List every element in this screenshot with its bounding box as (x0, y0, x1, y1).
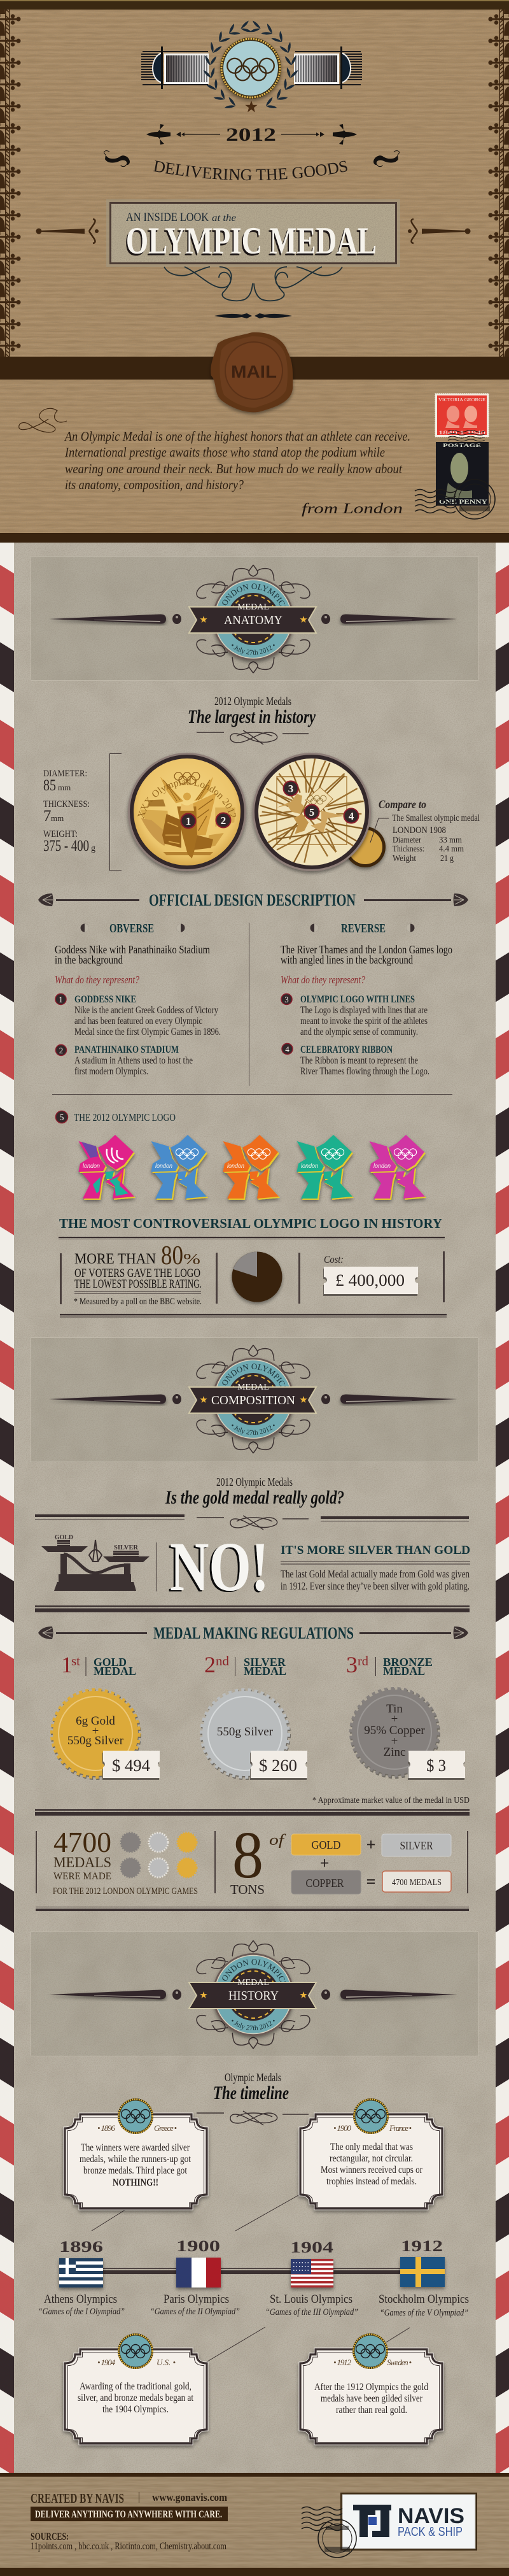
medal rank: 2nd silver: nd (216, 1653, 229, 1669)
stat: more than 80 percent: 80 (161, 1241, 183, 1270)
card: 1904: silver, and bronze medals began at (78, 2393, 193, 2403)
heading: the largest in history: The largest in history (188, 706, 316, 727)
timeline stop: 1896 Greece: 1896 (59, 2238, 103, 2256)
left rope ornament border (0, 10, 21, 357)
logo: orange: london (227, 1163, 244, 1170)
heading: is the gold medal really gold: 2012 Olympic Medals (216, 1476, 293, 1488)
timeline stop: 1904 USA (265, 2239, 358, 2317)
heading: the 2012 Olympic logo (56, 1111, 176, 1123)
stat: 8 tons equation: 8 (232, 1818, 263, 1892)
panel: gray paper with airmail edges (0, 543, 509, 2473)
timeline stop: 1900 France: “Games of the II Olympiad” (150, 2307, 240, 2317)
icon: left plane (146, 124, 171, 145)
footer credits (31, 2491, 228, 2552)
timeline stop: 1912 Sweden (379, 2238, 469, 2318)
left pin ornament (36, 219, 99, 243)
medal rank: 2nd silver: 2 (204, 1652, 216, 1677)
column: reverse: REVERSE (341, 922, 386, 936)
silver statement (281, 1544, 470, 1592)
timeline (38, 2238, 469, 2318)
heading: the timeline: The timeline (213, 2082, 289, 2103)
timeline stop: 1896 Greece: Athens Olympics (44, 2293, 117, 2306)
medal rank: 3rd bronze: rd (358, 1653, 368, 1669)
pointer lines (92, 2189, 410, 2367)
stats: diameter thickness weight (43, 754, 122, 871)
compare to smallest medal (370, 798, 480, 864)
item 1 goddess nike: GODDESS NIKE (74, 994, 136, 1005)
logo: green (296, 1135, 354, 1200)
stats: diameter thickness weight: 85 (43, 777, 56, 794)
heading: the 2012 Olympic logo: 5 (60, 1113, 64, 1123)
card: 1904: Awarding of the traditional gold, (80, 2381, 192, 2392)
top dark strip (0, 0, 509, 10)
title plate: an inside look at the Olympic medal (106, 199, 400, 267)
item 4 celebratory ribbon: CELEBRATORY RIBBON (300, 1044, 393, 1055)
item 3 olympic logo with lines: meant to invoke the spirit of the athletes (300, 1016, 428, 1027)
item 3 olympic logo with lines: OLYMPIC LOGO WITH LINES (300, 994, 415, 1005)
stat: 8 tons equation (230, 1818, 451, 1897)
timeline stop: 1896 Greece: “Games of the I Olympiad” (38, 2307, 125, 2317)
laurel wreath (204, 21, 298, 111)
section banner: medal composition (31, 1337, 478, 1462)
seal: silver composition: 550g Silver (217, 1725, 274, 1739)
footnote: * Approximate market value of the medal in USD (312, 1796, 470, 1805)
stat: 8 tons equation: + (366, 1835, 375, 1854)
column: obverse: OBVERSE (109, 922, 154, 936)
compare to smallest medal: Thickness: (393, 844, 424, 854)
medal: obverse (126, 753, 248, 875)
column: reverse (281, 922, 452, 1077)
column: reverse: What do they represent? (281, 974, 365, 986)
card: 1912 (300, 2333, 442, 2444)
stat: 4700 medals: WERE MADE (53, 1871, 111, 1882)
heading: medal making regulations (38, 1624, 468, 1642)
compare to smallest medal: Diameter (393, 836, 421, 845)
seal: bronze composition: 95% Copper (364, 1724, 425, 1737)
logo: magenta: london (373, 1163, 391, 1170)
subtitle: delivering the goods (104, 150, 400, 181)
signature: from London: from London (302, 501, 403, 516)
medallion (220, 38, 281, 99)
intro paragraph: wearing one around their neck. But how much do we really know about (65, 461, 403, 476)
section banner: medal anatomy: MEDAL (237, 602, 269, 612)
stat: 8 tons equation: + (320, 1854, 329, 1872)
title plate: an inside look at the Olympic medal: AN INSIDE LOOK (126, 211, 209, 224)
heading: medal making regulations: MEDAL MAKING REGULATIONS (153, 1624, 354, 1642)
stamp: red twin heads: 1840 1 1940 (438, 430, 485, 436)
seal: gold composition: 550g Silver (67, 1734, 124, 1747)
year 2012 with planes (146, 124, 357, 145)
item 4 celebratory ribbon: The Ribbon is meant to represent the (300, 1055, 418, 1066)
timeline stop: 1900 France: 1900 (176, 2238, 220, 2255)
card: 1900: The only medal that was (330, 2142, 413, 2153)
stamp: penny black: POSTAGE (443, 443, 481, 448)
card: 1896: medals, while the runners-up got (80, 2154, 191, 2165)
compare to smallest medal: Compare to (379, 798, 426, 811)
item 3 olympic logo with lines (281, 993, 428, 1037)
section banner: medal anatomy (31, 556, 478, 681)
title plate: an inside look at the Olympic medal: OLYMPIC MEDAL (126, 220, 377, 262)
postmark on stamps (415, 431, 495, 519)
stat: 8 tons equation: GOLD (312, 1839, 341, 1851)
flourish under title plate (164, 267, 342, 301)
stats: diameter thickness weight: WEIGHT: (43, 829, 78, 839)
timeline stop: 1912 Sweden: Stockholm Olympics (379, 2293, 469, 2306)
badge text: LONDON OLYMPICS (222, 1959, 286, 1982)
medal rank: 3rd bronze (346, 1652, 433, 1677)
compare to smallest medal: 33 mm (439, 836, 462, 845)
logo: blue (151, 1135, 208, 1200)
stat: 8 tons equation: SILVER (400, 1839, 433, 1852)
footer credits: www.gonavis.com (152, 2491, 227, 2503)
stat: 8 tons equation: 4700 MEDALS (392, 1878, 442, 1888)
card: 1900: • 1900 (333, 2123, 351, 2133)
medal: obverse: XXX Olympiad London 2012 (137, 778, 237, 819)
column: obverse: in the background (55, 953, 123, 966)
logo: paralympic pink (79, 1135, 136, 1200)
left swirl (104, 151, 130, 167)
timeline stop: 1904 USA: 1904 (290, 2239, 334, 2256)
medal rank: 1st gold: st (71, 1653, 80, 1669)
card: 1896: Greece • (154, 2123, 177, 2133)
small comparison medal (345, 827, 386, 867)
stat: more than 80 percent: OF VOTERS GAVE THE LOGO (74, 1267, 200, 1280)
column: reverse: The River Thames and the London Games logo (281, 943, 452, 956)
stats: diameter thickness weight: 375 - 400 (43, 837, 89, 855)
stat: 8 tons equation: = (366, 1872, 375, 1891)
timeline stop: 1904 USA: “Games of the III Olympiad” (265, 2307, 358, 2317)
stat: more than 80 percent (60, 1241, 218, 1307)
icon: right plane (333, 124, 357, 145)
dark band (0, 357, 509, 380)
item 4 celebratory ribbon: 4 (285, 1044, 289, 1054)
item 3 olympic logo with lines: The Logo is displayed with lines that are (300, 1005, 428, 1016)
medal: reverse (253, 753, 371, 871)
timeline stop: 1912 Sweden: “Games of the V Olympiad” (380, 2308, 468, 2318)
footer panel (0, 2473, 509, 2576)
icon: balance scale with gold and silver: GOLD (55, 1534, 73, 1541)
stat: cost: Cost: (324, 1253, 344, 1265)
heading: the largest in history: 2012 Olympic Medals (214, 695, 291, 708)
stats: diameter thickness weight: mm (51, 813, 64, 823)
column: obverse: Goddess Nike with Panathinaiko Stadium (55, 943, 210, 956)
stats: diameter thickness weight: 7 (43, 808, 51, 825)
section banner: medal anatomy: ANATOMY (224, 613, 282, 627)
star (245, 101, 258, 112)
card: 1896: • 1896 (97, 2123, 116, 2133)
panel: kraft header and intro (0, 0, 509, 533)
divider ornament (214, 313, 292, 318)
seal: bronze composition: $ 3 (426, 1756, 446, 1775)
item 1 goddess nike: 1 (59, 995, 63, 1004)
medal number markers: 5 (309, 806, 314, 818)
medal rank: 2nd silver: MEDAL (244, 1665, 286, 1677)
logo: orange (223, 1135, 280, 1200)
section banner: medal history: • July 27th 2012 • (232, 2020, 275, 2030)
item 1 goddess nike: Nike is the ancient Greek Goddess of Victory (74, 1005, 218, 1016)
silver statement: IT'S MORE SILVER THAN GOLD (281, 1544, 470, 1557)
small medals grid (121, 1833, 197, 1877)
section banner: medal history: HISTORY (228, 1989, 279, 2003)
stat: cost (298, 1251, 445, 1304)
item 2 panathinaiko stadium (56, 1044, 193, 1077)
heading: is the gold medal really gold (35, 1476, 469, 1530)
stat: cost: £ 400,000 (335, 1271, 405, 1290)
compare to smallest medal: The Smallest olympic medal (392, 813, 480, 823)
seal: gold composition: $ 494 (112, 1756, 150, 1775)
icon: N mark (353, 2505, 391, 2537)
logo card: navis pack and ship (340, 2493, 477, 2551)
seal: silver composition (202, 1691, 307, 1778)
item 1 goddess nike: Medal since the first Olympic Games in 1896. (74, 1027, 221, 1037)
heading: the 2012 Olympic logo: THE 2012 OLYMPIC LOGO (74, 1111, 176, 1123)
intro paragraph: its anatomy, composition, and history? (65, 477, 244, 492)
section banner: medal composition: • July 27th 2012 • (232, 1424, 275, 1435)
footer credits: SOURCES: (31, 2531, 69, 2542)
card: 1896: bronze medals. Third place got (83, 2165, 187, 2176)
stamp: red twin heads: VICTORIA GEORGE (438, 397, 485, 402)
medal rank: 2nd silver (204, 1652, 286, 1677)
card: 1904: U.S. • (157, 2358, 176, 2367)
column: obverse: What do they represent? (55, 974, 139, 986)
item 3 olympic logo with lines: 3 (284, 995, 289, 1004)
item 1 goddess nike (55, 993, 221, 1037)
logo card: navis pack and ship: NAVIS (398, 2504, 464, 2528)
footer credits: 11points.com , bbc.co.uk , Riotinto.com, Chemistry.about.com (31, 2541, 227, 2552)
seal: gold composition (53, 1691, 160, 1778)
card: 1912: After the 1912 Olympics the gold (314, 2382, 428, 2393)
icon: Olympic emblem with laurel wreath (141, 21, 362, 112)
card: 1900: Most winners received cups or (321, 2165, 423, 2175)
timeline stop: 1900 France: Paris Olympics (164, 2293, 229, 2306)
subtitle: delivering the goods: DELIVERING THE GOODS (153, 160, 347, 181)
medal rank: 1st gold: GOLD (94, 1656, 127, 1669)
intro paragraph: An Olympic Medal is one of the highest honors that an athlete can receive. (64, 429, 410, 444)
medal rank: 1st gold: MEDAL (94, 1665, 136, 1677)
right rope ornament border (488, 10, 509, 357)
card: 1904: the 1904 Olympics. (102, 2404, 169, 2415)
stat: 4700 medals: MEDALS (53, 1854, 111, 1870)
title plate: an inside look at the Olympic medal: at the (212, 213, 236, 224)
card: 1912: medals have been gilded silver (321, 2393, 423, 2404)
logo card: navis pack and ship: PACK & SHIP (398, 2525, 463, 2539)
medal number markers: 1 (186, 815, 191, 827)
timeline stop: 1900 France (150, 2238, 240, 2317)
big NO: NO! (170, 1528, 269, 1605)
medal rank: 1st gold: 1 (61, 1652, 73, 1677)
medal rank: 1st gold (61, 1652, 136, 1677)
item 1 goddess nike: and has been featured on every Olympic (74, 1016, 202, 1027)
seal: bronze composition: + (391, 1712, 398, 1726)
swirl ornament (19, 408, 67, 432)
card: 1912: Sweden • (387, 2358, 412, 2367)
stat: 4700 medals: FOR THE 2012 LONDON OLYMPIC GAMES (53, 1886, 198, 1896)
stat: 4700 medals: 4700 (53, 1826, 111, 1858)
heading: the timeline: Olympic Medals (225, 2071, 281, 2084)
footer credits: DELIVER ANYTHING TO ANYWHERE WITH CARE. (35, 2509, 222, 2520)
card: 1900: rectangular, not circular. (330, 2153, 413, 2164)
medal number markers: 4 (349, 810, 354, 822)
stamp: red twin heads (435, 394, 489, 437)
column: reverse: with angled lines in the background (281, 953, 413, 966)
wax seal: mail: MAIL (231, 362, 277, 381)
medal number markers: 2 (221, 815, 226, 827)
left ribbon (141, 46, 209, 89)
card: 1896 (65, 2098, 207, 2209)
seal: bronze composition: Zinc (384, 1746, 405, 1759)
heading: is the gold medal really gold: Is the gold medal really gold? (165, 1487, 344, 1508)
card: 1900: France • (389, 2123, 412, 2133)
icon: balance scale with gold and silver (41, 1534, 150, 1591)
section banner: medal anatomy: • July 27th 2012 • (232, 644, 275, 655)
seal: gold composition: 6g Gold (76, 1714, 115, 1728)
section banner: medal composition: MEDAL (237, 1383, 269, 1392)
compare to smallest medal: LONDON 1908 (393, 825, 446, 836)
right ribbon (294, 46, 362, 89)
footer credits: CREATED BY NAVIS (31, 2491, 124, 2506)
stats: diameter thickness weight: THICKNESS: (43, 799, 90, 809)
item 2 panathinaiko stadium: A stadium in Athens used to host the (74, 1055, 193, 1066)
stats: diameter thickness weight: g (91, 844, 95, 853)
card: 1896: The winners were awarded silver (81, 2142, 190, 2153)
heading: the timeline (197, 2071, 309, 2125)
stat: 8 tons equation: COPPER (305, 1877, 344, 1889)
badge text: LONDON OLYMPICS (222, 583, 286, 606)
intro paragraph (64, 429, 410, 492)
medal number markers: 3 (288, 783, 293, 795)
dark band lower (0, 533, 509, 543)
column: obverse (55, 922, 221, 1077)
compare to smallest medal: Weight (393, 854, 416, 864)
stamp: penny black (436, 442, 489, 506)
card: 1912: • 1912 (333, 2358, 351, 2367)
seal: bronze composition: + (391, 1735, 398, 1748)
card: 1900: trophies instead of medals. (326, 2176, 417, 2187)
logo: green: london (301, 1163, 318, 1170)
logo: magenta (369, 1135, 426, 1200)
chart: pie 80 percent (232, 1252, 282, 1302)
right swirl (373, 151, 399, 167)
heading: official design description: OFFICIAL DESIGN DESCRIPTION (149, 891, 356, 909)
year 2012 with planes: 2012 (226, 124, 276, 145)
item 2 panathinaiko stadium: first modern Olympics. (74, 1066, 148, 1077)
seal: silver composition: $ 260 (259, 1756, 297, 1775)
seal: gold composition: + (92, 1725, 99, 1738)
stat: 8 tons equation: of (269, 1832, 286, 1849)
medal rank: 2nd silver: SILVER (244, 1656, 286, 1669)
postmark on logo card (302, 2507, 356, 2558)
wax seal: mail (211, 332, 293, 412)
intro paragraph: International prestige awaits those who stand atop the podium while (64, 445, 385, 460)
medal rank: 3rd bronze: 3 (346, 1652, 358, 1677)
section banner: medal history (31, 1932, 478, 2056)
section banner: medal history: MEDAL (237, 1978, 269, 1988)
timeline stop: 1904 USA: St. Louis Olympics (270, 2293, 352, 2306)
medal rank: 3rd bronze: MEDAL (383, 1665, 425, 1677)
stat: more than 80 percent: MORE THAN (74, 1251, 156, 1267)
stat: 4700 medals (36, 1826, 468, 1896)
card: 1896: NOTHING!! (113, 2177, 158, 2188)
stat: more than 80 percent: % (183, 1251, 200, 1268)
heading: the largest in history (188, 695, 316, 744)
card: 1900 (300, 2098, 442, 2209)
timeline stop: 1896 Greece (38, 2238, 125, 2317)
stat: 8 tons equation: TONS (230, 1882, 265, 1897)
heading: most controversial logo: THE MOST CONTROVERSIAL OLYMPIC LOGO IN HISTORY (59, 1216, 442, 1231)
item 4 celebratory ribbon (282, 1043, 429, 1077)
card: 1904 (65, 2333, 207, 2444)
badge text: LONDON OLYMPICS (222, 1363, 286, 1386)
stamp: penny black: ONE PENNY (439, 499, 488, 505)
item 2 panathinaiko stadium: 2 (59, 1046, 63, 1055)
icon: balance scale with gold and silver: SILVER (114, 1544, 139, 1551)
seal: bronze composition: Tin (386, 1702, 403, 1716)
stats: diameter thickness weight: mm (58, 783, 71, 792)
logos row (79, 1135, 426, 1200)
compare to smallest medal: 4.4 mm (439, 844, 464, 854)
seal: bronze composition (352, 1690, 465, 1778)
timeline stop: 1912 Sweden: 1912 (401, 2238, 443, 2255)
item 3 olympic logo with lines: and the olympic sense of community. (300, 1027, 418, 1037)
item 4 celebratory ribbon: River Thames flowing through the Logo. (300, 1066, 429, 1077)
stat: more than 80 percent: THE LOWEST POSSIBLE RATING. (74, 1277, 202, 1291)
medal number markers (181, 781, 359, 828)
card: 1904: • 1904 (97, 2358, 116, 2367)
medal rank: 3rd bronze: BRONZE (383, 1656, 433, 1669)
card: 1912: rather than real gold. (336, 2405, 407, 2416)
section banner: medal composition: COMPOSITION (211, 1393, 295, 1407)
heading: official design description (38, 891, 468, 909)
item 2 panathinaiko stadium: PANATHINAIKO STADIUM (74, 1044, 179, 1055)
stat: more than 80 percent: * Measured by a poll on the BBC website. (74, 1297, 202, 1307)
logo: blue: london (155, 1163, 172, 1170)
compare to smallest medal: 21 g (440, 854, 454, 864)
stats: diameter thickness weight: DIAMETER: (43, 769, 87, 779)
logo: paralympic pink: london (83, 1163, 100, 1170)
right pin ornament (408, 219, 471, 243)
